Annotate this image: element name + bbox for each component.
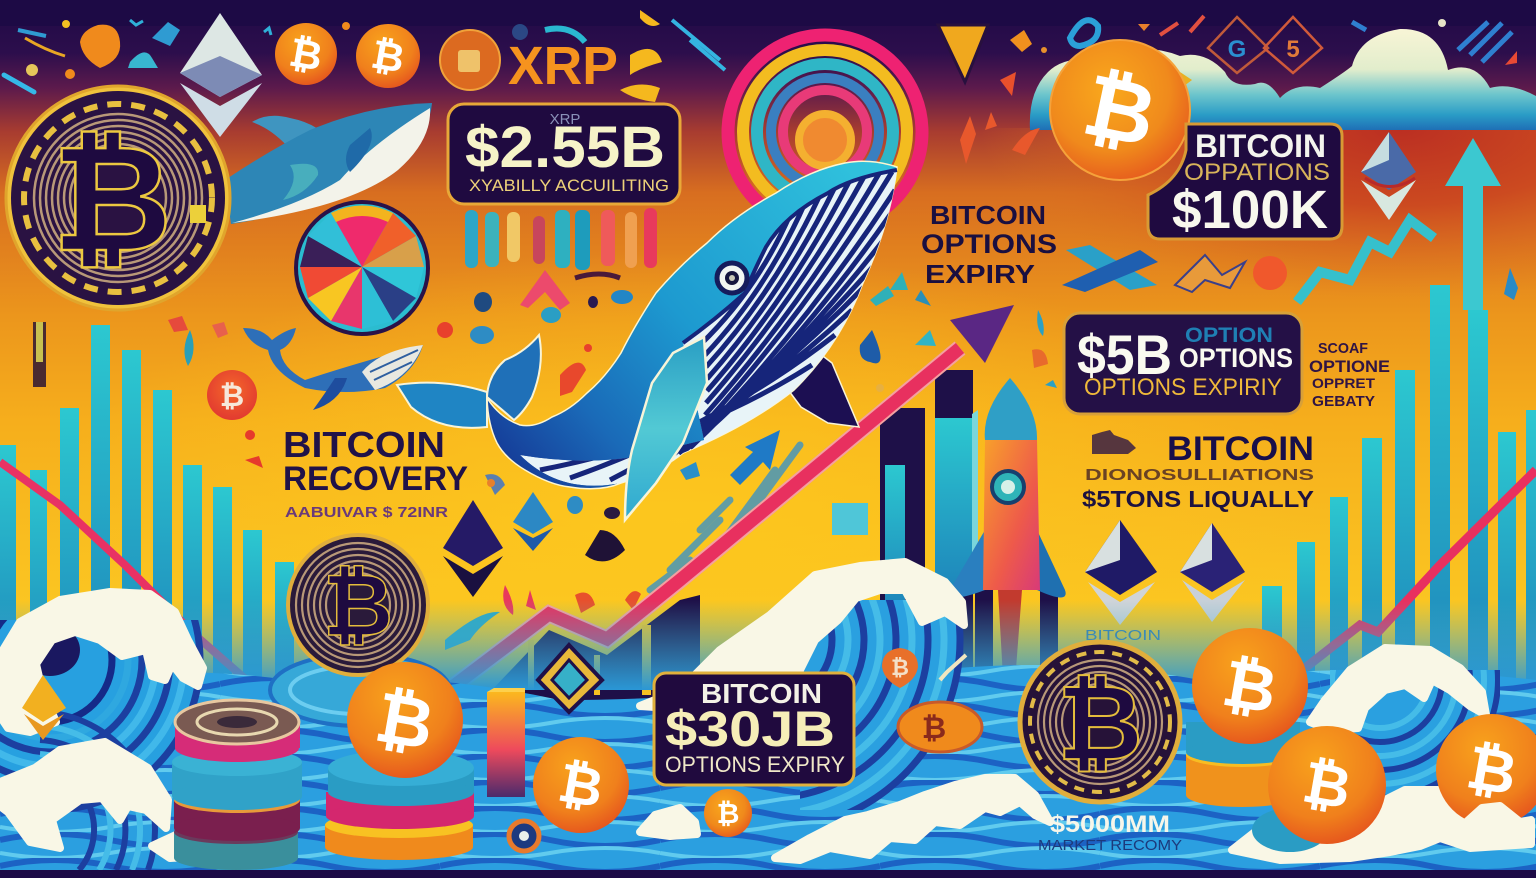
small blue arrow xyxy=(730,430,780,485)
coin: orange on centre stack xyxy=(347,662,463,778)
icon: ethereum pair centre xyxy=(1085,520,1245,625)
right bar chart xyxy=(1262,285,1536,686)
side small text block: GEBATY xyxy=(1312,393,1375,410)
small coloured blobs left xyxy=(168,316,263,468)
big teal up arrow xyxy=(1445,138,1501,310)
foam overlapping far right coin xyxy=(1440,806,1531,848)
bottom dark strip xyxy=(0,870,1536,878)
coin: orange bitcoin top left xyxy=(275,23,337,85)
panel: bitcoin options 100K: OPPATIONS xyxy=(1184,159,1330,186)
icon: ethereum top right xyxy=(1361,132,1416,220)
coin: orange right upper: ₿ xyxy=(1217,646,1282,729)
heading: bitcoin options expiry: BITCOIN xyxy=(930,200,1046,230)
panel: XRP 2.55B: XRP xyxy=(550,111,580,128)
big pink trend arrow xyxy=(451,305,1014,688)
coin: xrp badge xyxy=(440,30,500,90)
coin: large orange bitcoin xyxy=(1050,40,1190,180)
wave foam xyxy=(0,562,1486,860)
icon: top right diamond pair xyxy=(1208,17,1322,73)
coin: melted orange disc: ₿ xyxy=(922,711,946,746)
panel: 5B options expiry: OPTION xyxy=(1185,324,1273,347)
icon: gold ethereum left xyxy=(22,675,66,740)
stack of coins centre xyxy=(325,750,474,860)
heading: bitcoin options expiry: OPTIONS xyxy=(921,229,1057,259)
side small text block: SCOAF xyxy=(1318,340,1368,357)
cloud band xyxy=(1030,29,1536,130)
coin: orange right upper xyxy=(1192,628,1308,744)
text block: bitcoin liquidity: $5TONS LIQUALLY xyxy=(1082,486,1314,512)
coin: orange right lower: ₿ xyxy=(1298,747,1356,823)
icon: ethereum dark xyxy=(443,500,503,597)
text block: bitcoin liquidity xyxy=(1082,430,1314,512)
panel: XRP 2.55B: XYABILLY ACCUILITING xyxy=(469,176,669,195)
panel: XRP 2.55B xyxy=(448,104,680,204)
text block: market recovery: $5000MM xyxy=(1050,811,1170,838)
coin: orange small bottom: ₿ xyxy=(554,751,608,820)
coin: small orange wave xyxy=(882,648,966,688)
text block: bitcoin liquidity: BITCOIN xyxy=(1167,430,1314,468)
text block: bitcoin recovery: BITCOIN xyxy=(283,424,445,465)
small ring icon xyxy=(509,821,539,851)
coin: small orange bottom centre: ₿ xyxy=(717,797,739,830)
panel: bitcoin 30B: $30JB xyxy=(665,701,835,757)
coin: engraved coin left xyxy=(288,535,428,675)
panel: 5B options expiry xyxy=(1064,313,1302,414)
stack under coin right xyxy=(1186,722,1328,852)
side small text block: OPPRET xyxy=(1312,375,1375,391)
coin: small orange wave: ₿ xyxy=(891,656,909,681)
coin: orange far right xyxy=(1436,714,1536,826)
text block: bitcoin recovery xyxy=(283,424,468,521)
heading: XRP: XRP xyxy=(508,36,618,96)
panel: bitcoin options 100K xyxy=(1148,124,1342,240)
crossed blue shape and colourful pieces xyxy=(1062,245,1518,300)
wave barrel right xyxy=(1330,670,1500,796)
coin: orange right lower xyxy=(1268,726,1386,844)
coin: melted orange disc xyxy=(898,702,982,752)
icon: small red bitcoin coin: ₿ xyxy=(220,379,244,414)
text block: bitcoin recovery: RECOVERY xyxy=(283,460,468,498)
right pink trend line xyxy=(1305,470,1536,668)
icon: ethereum blue xyxy=(513,492,553,551)
label: faint bitcoin: BITCOIN xyxy=(1085,627,1161,644)
text block: bitcoin liquidity: DIONOSULLIATIONS xyxy=(1085,467,1314,484)
panel: XRP 2.55B: $2.55B xyxy=(465,115,665,180)
stack of coins left xyxy=(172,700,302,870)
colour swatch strips under XRP panel xyxy=(465,208,657,270)
top whale xyxy=(225,103,432,224)
wave barrel left xyxy=(0,620,204,812)
coin: engraved coin right xyxy=(1020,642,1180,802)
small whale xyxy=(243,328,423,410)
side small text block xyxy=(1309,340,1390,410)
big gold bitcoin coin: ₿ xyxy=(52,113,172,285)
icon: ethereum top xyxy=(180,13,262,137)
coin: large orange bitcoin: ₿ xyxy=(1075,55,1164,167)
pie wheel xyxy=(296,202,428,334)
panel: 5B options expiry: OPTIONS xyxy=(1179,343,1293,373)
icon: top right diamond pair: G xyxy=(1228,36,1246,63)
left pink trend line xyxy=(0,462,258,690)
rocket xyxy=(949,378,1066,695)
panel: bitcoin options 100K: $100K xyxy=(1172,180,1328,240)
wave barrel lower left xyxy=(40,712,155,870)
icon: small red bitcoin coin xyxy=(207,370,257,420)
coin: orange bitcoin top middle xyxy=(356,24,420,88)
heading: bitcoin options expiry xyxy=(921,200,1057,289)
diamond emblem xyxy=(538,645,602,712)
coin: small orange bottom centre xyxy=(704,789,752,837)
big whale xyxy=(397,161,897,520)
text block: market recovery xyxy=(1038,811,1182,854)
concentric rainbow arcs xyxy=(728,35,922,229)
wave barrel centre xyxy=(800,600,964,810)
panel: bitcoin 30B: BITCOIN xyxy=(701,678,822,709)
panel: 5B options expiry: OPTIONS EXPIRIY xyxy=(1084,374,1282,401)
panel: bitcoin 30B: OPTIONS EXPIRY xyxy=(665,752,845,777)
coin: engraved coin left: ₿ xyxy=(323,556,393,656)
side small text block: OPTIONE xyxy=(1309,357,1390,376)
ocean xyxy=(0,600,1536,878)
panel: bitcoin 30B xyxy=(654,673,854,785)
coin: orange bitcoin top middle: ₿ xyxy=(368,32,408,82)
scattered shapes near whale xyxy=(437,270,1057,561)
coin: orange far right: ₿ xyxy=(1462,732,1522,810)
coin: orange bitcoin top left: ₿ xyxy=(286,30,326,80)
text block: market recovery: MARKET RECOMY xyxy=(1038,837,1182,854)
coin: engraved coin right: ₿ xyxy=(1057,662,1143,784)
teal zigzag trend xyxy=(1297,220,1434,302)
icon: top right diamond pair: 5 xyxy=(1286,36,1300,63)
panel: 5B options expiry: $5B xyxy=(1077,323,1172,386)
heading: bitcoin options expiry: EXPIRY xyxy=(925,259,1035,289)
panel: bitcoin options 100K: BITCOIN xyxy=(1195,128,1326,164)
coin: orange small bottom xyxy=(533,737,629,833)
confetti: top band xyxy=(4,10,1517,164)
central dark and teal bars xyxy=(490,370,1058,708)
big gold bitcoin coin xyxy=(6,86,230,310)
gradient mini bar xyxy=(487,688,525,797)
coin: orange on centre stack: ₿ xyxy=(370,676,440,766)
scattered shapes between whale and bars xyxy=(445,445,800,650)
text block: bitcoin recovery: AABUIVAR $ 72INR xyxy=(285,504,448,521)
left bar chart xyxy=(0,322,294,690)
